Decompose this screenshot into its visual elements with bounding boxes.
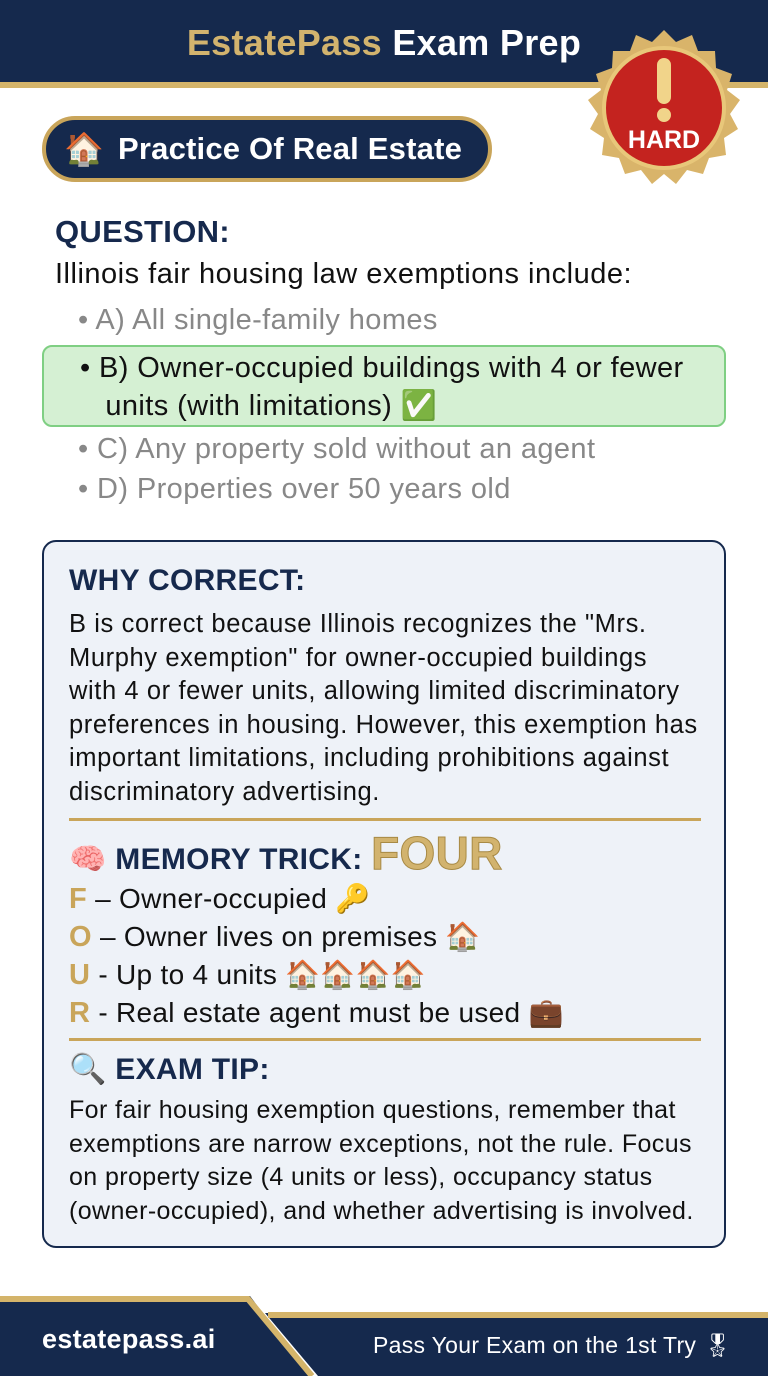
option D: • D) Properties over 50 years old — [78, 473, 511, 505]
memory list: F – Owner-occupied 🔑 — [69, 883, 370, 915]
badge: hard — [588, 30, 740, 184]
why correct text: discriminatory advertising. — [69, 778, 380, 806]
memory list: R - Real estate agent must be used 💼 — [69, 997, 564, 1029]
panel: explanation — [42, 540, 726, 1248]
option B correct: • B) Owner-occupied buildings with 4 or fewer — [80, 352, 684, 384]
icon: house: 🏠 — [64, 131, 104, 167]
why correct text: important limitations, including prohibitions against — [69, 744, 669, 772]
question text: Illinois fair housing law exemptions include: — [55, 258, 632, 290]
badge: hard: HARD — [628, 126, 700, 154]
memory trick heading: 🧠 MEMORY TRICK: FOUR — [69, 827, 503, 879]
why correct heading: WHY CORRECT: — [69, 564, 305, 597]
exam tip text: (owner-occupied), and whether advertising is involved. — [69, 1196, 694, 1224]
category pill: Practice Of Real Estate — [118, 131, 462, 166]
footer url: estatepass.ai — [42, 1324, 216, 1354]
title: EstatePass Exam Prep — [187, 22, 581, 63]
footer — [0, 1296, 768, 1376]
question heading: QUESTION: — [55, 214, 230, 249]
option B correct: units (with limitations) ✅ — [105, 390, 437, 422]
option B correct — [42, 345, 726, 427]
memory list: O – Owner lives on premises 🏠 — [69, 921, 481, 953]
exam tip text: exemptions are narrow exceptions, not the rule. Focus — [69, 1130, 692, 1158]
category pill — [42, 116, 492, 182]
why correct text: Murphy exemption" for owner-occupied buildings — [69, 644, 647, 672]
why correct text: with 4 or fewer units, allowing limited discriminatory — [69, 677, 680, 705]
memory list — [69, 883, 564, 1029]
option A: • A) All single-family homes — [78, 304, 438, 336]
why correct text: preferences in housing. However, this exemption has — [69, 710, 698, 738]
option C: • C) Any property sold without an agent — [78, 433, 595, 465]
memory list: U - Up to 4 units 🏠🏠🏠🏠 — [69, 959, 426, 991]
options — [42, 304, 726, 505]
exam tip text: on property size (4 units or less), occupancy status — [69, 1163, 653, 1191]
exam tip heading: 🔍 EXAM TIP: — [69, 1053, 270, 1086]
exam tip text: For fair housing exemption questions, remember that — [69, 1096, 676, 1124]
header bar — [0, 0, 768, 88]
exam tip text — [69, 1096, 694, 1224]
why correct text — [69, 610, 698, 806]
footer tagline: Pass Your Exam on the 1st Try 🎖 — [373, 1332, 732, 1358]
why correct text: B is correct because Illinois recognizes the "Mrs. — [69, 610, 647, 638]
